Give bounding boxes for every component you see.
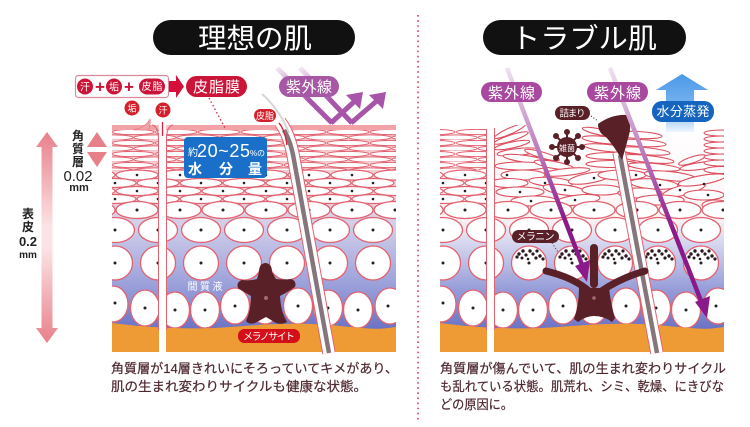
label: sebum xyxy=(254,109,276,122)
bacteria xyxy=(550,130,584,164)
caption: ideal skin: 角質層が14層きれいにそろっていてキメがあり、 xyxy=(111,361,398,376)
callout: moisture 20-25%: 水 xyxy=(188,161,202,177)
callout: moisture 20-25%: 約 xyxy=(188,146,198,159)
melanin pill xyxy=(512,230,559,243)
caption: ideal skin xyxy=(111,361,398,394)
arrow: stratum corneum thickness xyxy=(87,132,107,167)
callout: moisture 20-25%: 分 xyxy=(219,161,233,177)
cell nuclei xyxy=(506,174,709,202)
label: dirt xyxy=(124,100,140,116)
label: UV left: 紫外線 xyxy=(286,79,332,96)
pill: UV 1: 紫外線 xyxy=(488,85,535,102)
disordered upper cells xyxy=(495,125,724,207)
melanocyte pill xyxy=(238,329,300,343)
label: epidermis 0.2 mm: mm xyxy=(19,250,37,261)
callout: moisture 20-25%: %の xyxy=(250,149,265,158)
sebum arrow xyxy=(279,123,287,145)
pill: UV 2 xyxy=(587,82,648,102)
caption: trouble skin: も乱れている状態。肌荒れ、シミ、乾燥、にきびな xyxy=(440,379,724,394)
callout: moisture 20-25%: 20~25 xyxy=(197,141,250,161)
panel: trouble skin cross-section xyxy=(440,67,724,354)
sweat duct xyxy=(159,125,166,353)
hair follicle xyxy=(280,122,329,353)
UV arrow 2 xyxy=(610,68,710,318)
caption: trouble skin: どの原因に。 xyxy=(440,397,513,412)
title: ideal skin xyxy=(153,20,355,55)
melanin dotted leader xyxy=(552,243,558,252)
pill: clog: 詰まり xyxy=(560,108,586,120)
surface band xyxy=(112,125,396,135)
label: dirt: 垢 xyxy=(127,102,137,114)
pill: water evaporation: 水分蒸発 xyxy=(656,104,710,119)
formula: sweat + dirt + sebum: 汗 xyxy=(80,80,90,94)
label: stratum corneum 0.02 mm: mm xyxy=(69,182,89,194)
orange dermis xyxy=(112,323,396,352)
label: epidermis 0.2 mm: 表 xyxy=(22,206,34,221)
caption: trouble skin: 角質層が傷んでいて、肌の生まれ変わりサイクル xyxy=(440,361,726,376)
hair clog xyxy=(598,115,630,160)
label: sweat xyxy=(156,102,170,118)
pill: water evaporation xyxy=(652,101,714,122)
pill: sebum film: 皮脂膜 xyxy=(193,79,240,96)
reflected UV arrows xyxy=(331,99,379,123)
arrow: water evaporation xyxy=(656,74,708,132)
melanin spots in cells xyxy=(515,249,717,261)
panel: ideal skin cross-section xyxy=(73,94,416,353)
label: stratum corneum 0.02 mm: 質 xyxy=(72,141,84,156)
label: sebum: 皮脂 xyxy=(256,110,274,121)
hair tip xyxy=(262,94,289,133)
title: ideal skin: 理想の肌 xyxy=(198,23,312,54)
orange dermis xyxy=(440,323,724,352)
callout: moisture 20-25% xyxy=(184,137,267,178)
label: UV left xyxy=(277,68,386,123)
melanocyte xyxy=(238,263,296,324)
label: epidermis 0.2 mm xyxy=(19,206,37,261)
melanocyte nucleus xyxy=(264,296,268,300)
label: epidermis 0.2 mm: 0.2 xyxy=(19,234,37,249)
bacteria: 雑菌 xyxy=(559,143,575,153)
pill: UV 2: 紫外線 xyxy=(594,85,641,102)
hair follicle xyxy=(619,152,657,353)
label: stratum corneum 0.02 mm: 層 xyxy=(72,155,84,169)
clog dotted leader xyxy=(591,116,598,121)
melanocyte pill: メラノサイト xyxy=(243,331,295,343)
title: trouble skin xyxy=(483,20,686,55)
label: sweat: 汗 xyxy=(158,104,168,116)
left column layers xyxy=(440,129,487,170)
label: stratum corneum 0.02 mm: 角 xyxy=(72,128,84,143)
formula: sweat + dirt + sebum: 皮脂 xyxy=(142,80,162,93)
thin stratum corneum layers xyxy=(112,129,396,170)
label: stratum corneum 0.02 mm: 0.02 xyxy=(64,168,92,185)
arrow: epidermis thickness xyxy=(36,132,58,343)
formula: sweat + dirt + sebum xyxy=(76,76,168,98)
pill: UV 1 xyxy=(481,82,542,102)
formula: sweat + dirt + sebum: + xyxy=(95,78,105,96)
title: trouble skin: トラブル肌 xyxy=(511,23,657,54)
label: epidermis 0.2 mm: 皮 xyxy=(22,219,34,234)
melanin pill: メラニン xyxy=(516,231,554,243)
callout: moisture 20-25%: 量 xyxy=(248,161,262,177)
arrow: formula to sebum film xyxy=(169,75,184,98)
UV arrow 1 xyxy=(507,68,590,282)
formula: sweat + dirt + sebum: + xyxy=(124,78,134,96)
caption: trouble skin xyxy=(440,361,726,412)
melanocyte with long arms xyxy=(546,248,645,322)
formula: sweat + dirt + sebum: 垢 xyxy=(109,80,119,94)
interstitial fluid label: 間質液 xyxy=(188,280,222,293)
sebum film dotted leader xyxy=(209,98,225,128)
caption: ideal skin: 肌の生まれ変わりサイクルも健康な状態。 xyxy=(111,379,367,394)
pill: clog xyxy=(555,106,590,120)
pill: sebum film xyxy=(186,76,247,97)
center dotted divider xyxy=(417,15,419,422)
sweat duct xyxy=(487,125,494,353)
label: stratum corneum 0.02 mm xyxy=(64,128,92,194)
dead skin flake xyxy=(133,119,150,130)
